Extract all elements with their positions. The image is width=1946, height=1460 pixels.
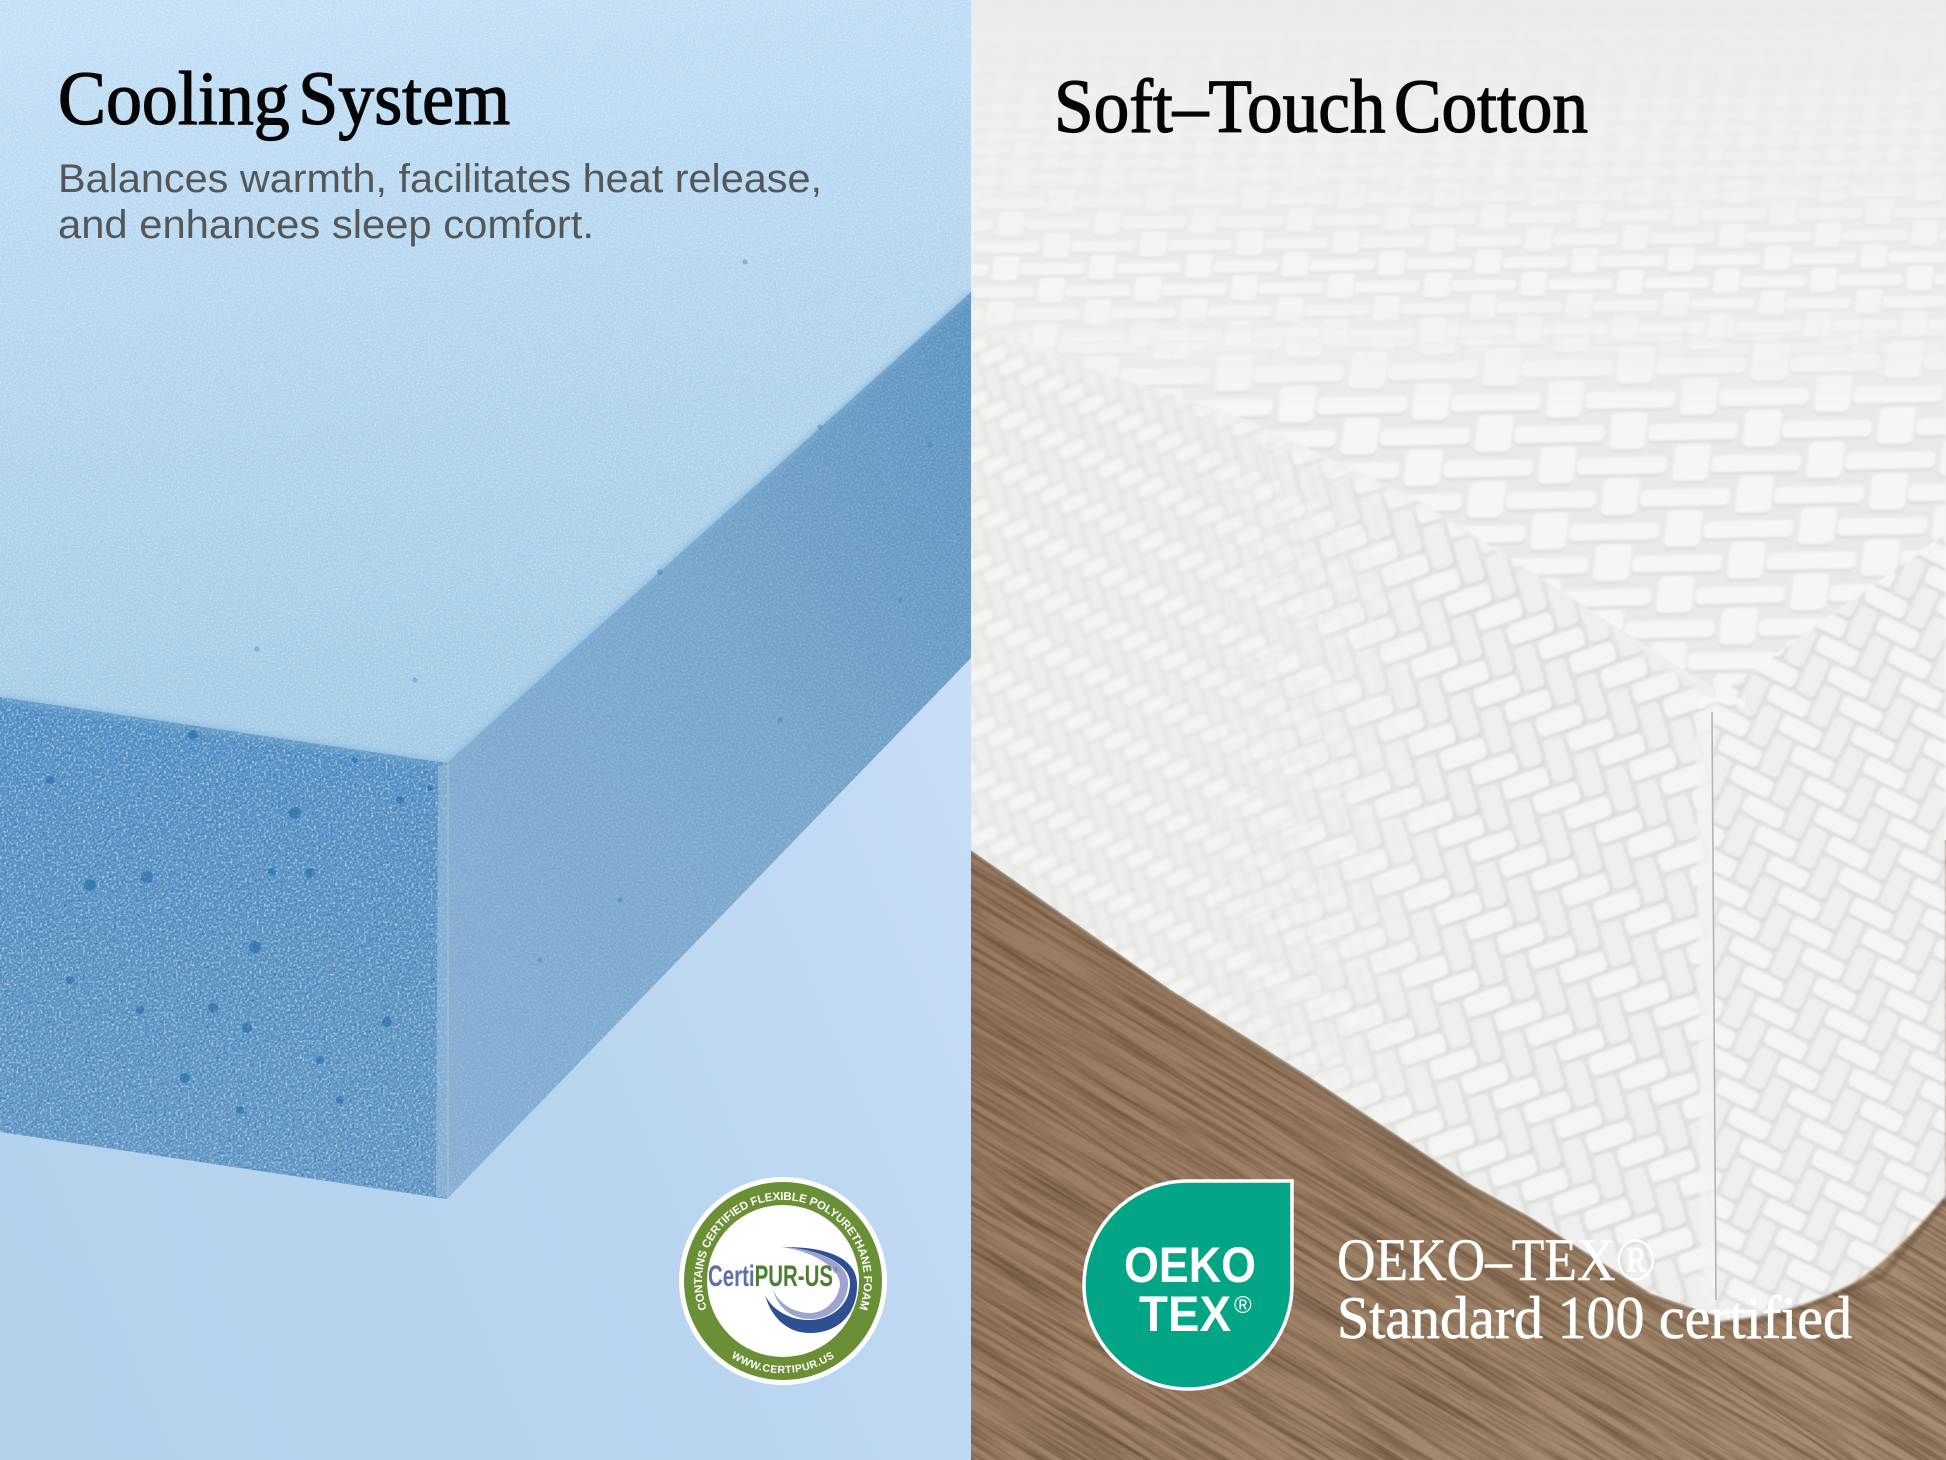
mattress side face [1712, 534, 1946, 1322]
badge: OEKO-TEX leaf [1084, 1181, 1292, 1389]
text block: cooling description: and enhances sleep comfort. [58, 203, 594, 247]
text block: OEKO-TEX certification [1337, 1227, 1852, 1351]
leaf registered mark: ® [1234, 1292, 1252, 1319]
mid weave texture [972, 246, 1945, 310]
panel: cotton mattress photo [960, 0, 1946, 1460]
mattress front underlay [960, 320, 1729, 1320]
corner seam [1696, 698, 1744, 1310]
text block: OEKO-TEX certification: OEKO–TEX® [1337, 1227, 1656, 1293]
background: pale blue backdrop [0, 0, 971, 1460]
foam edge softening [0, 293, 971, 764]
badge: CertiPUR-US [679, 1177, 887, 1385]
text block: OEKO-TEX certification: Standard 100 certified [1337, 1285, 1852, 1351]
logo registered mark: ® [833, 1266, 839, 1275]
logo wordmark: CertiPUR-US [708, 1260, 833, 1293]
text block: cooling description [58, 157, 822, 247]
title: Cooling System: Cooling System [58, 57, 510, 141]
wood floor [960, 840, 1946, 1460]
foam side face [447, 292, 971, 1199]
large weave [1241, 446, 1714, 1316]
foam top face [0, 0, 971, 763]
leaf label TEX: TEX [1139, 1286, 1231, 1342]
mattress shadow on floor [971, 852, 1946, 1323]
wood plank seams [971, 1053, 1840, 1460]
far weave texture [971, 0, 1946, 700]
foam pores on front [46, 730, 433, 1114]
mattress front face [960, 320, 1729, 1322]
leaf label OEKO: OEKO [1124, 1237, 1256, 1293]
near weave texture [1060, 355, 1946, 686]
title: Soft-Touch Cotton: Soft–Touch Cotton [1054, 65, 1588, 149]
ring text bottom: WWW.CERTIPUR.US [732, 1351, 834, 1374]
foam front face [0, 697, 447, 1199]
foam corner highlight [436, 764, 449, 1198]
ring text top: CONTAINS CERTIFIED FLEXIBLE POLYURETHANE FOAM [694, 1192, 872, 1310]
foam pores on top and side [254, 260, 932, 962]
swoosh: lavender [773, 1247, 848, 1319]
text block: cooling description: Balances warmth, facilitates heat release, [58, 157, 822, 201]
mattress top face [960, 0, 1946, 700]
wood grain [960, 840, 1946, 1460]
panel: cooling foam photo [0, 0, 971, 1460]
swoosh: dark blue [765, 1247, 857, 1333]
small weave [960, 320, 1729, 1322]
